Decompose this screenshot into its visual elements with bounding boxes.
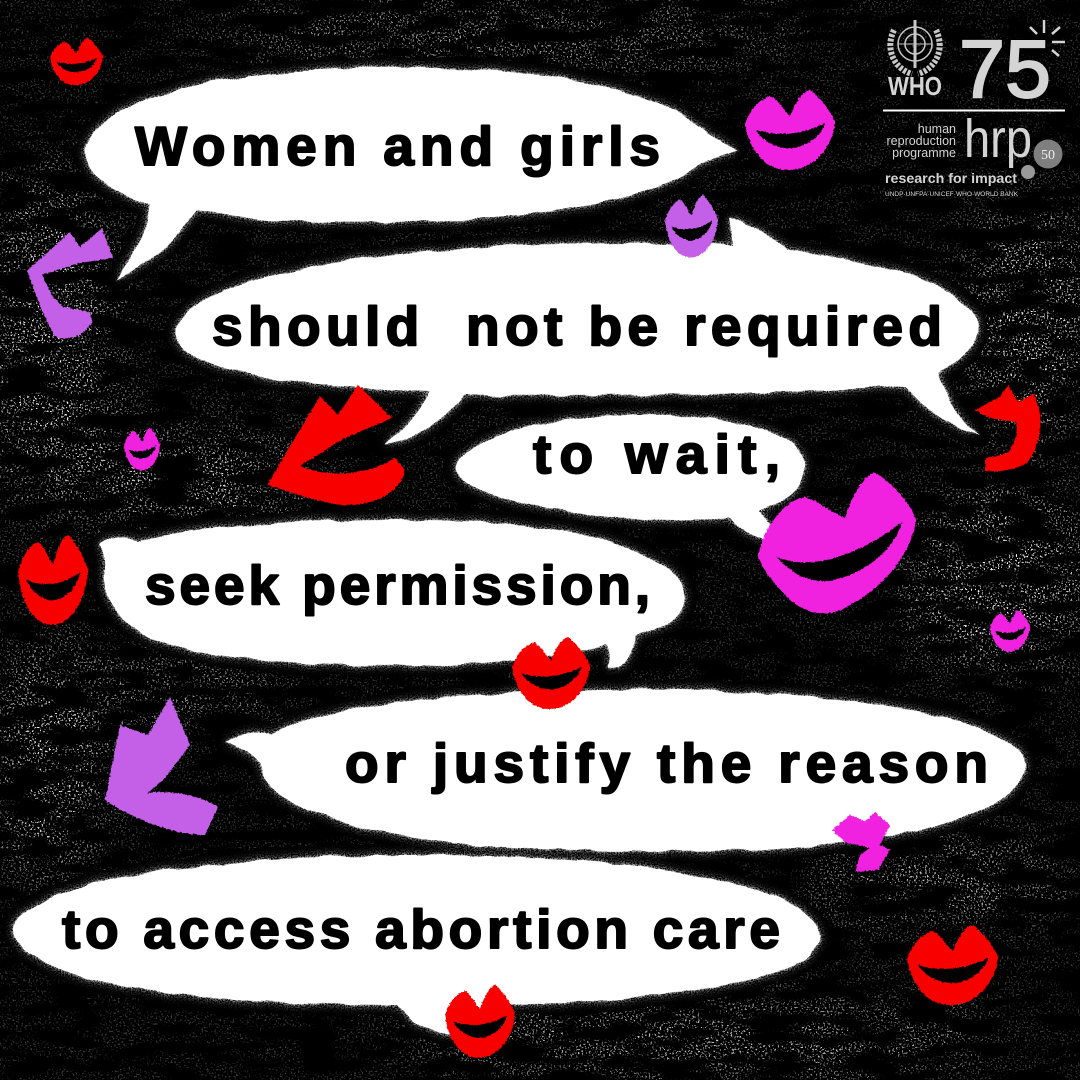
text: to access abortion care: to access abortion care [62, 898, 780, 960]
speech bubble: Women and girls [85, 68, 738, 280]
icon: WHO emblem [890, 20, 940, 74]
text: research for impact: research for impact [885, 171, 1018, 186]
speech bubble: or justify the reason [225, 690, 1025, 851]
icon: magenta lips top [745, 90, 835, 170]
icon: grey dot [1021, 165, 1035, 179]
text: human reproduction programme: human [918, 122, 956, 136]
divider [883, 110, 1065, 112]
icon: large purple lips [105, 697, 218, 835]
text: human reproduction programme: programme [892, 146, 956, 160]
speech bubble: to access abortion care [15, 855, 820, 1035]
icon: red lips right [975, 385, 1041, 471]
icon: red lips centre [512, 637, 590, 709]
text: hrp: hrp [964, 109, 1032, 169]
text: should not be required: should not be required [212, 295, 942, 357]
speech bubble: seek permission [100, 520, 685, 668]
text: to wait,: to wait, [533, 423, 780, 485]
text: seek permission,: seek permission, [145, 554, 650, 616]
icon: sun rays [1030, 20, 1065, 56]
icon: 50 badge: 50 [1041, 148, 1055, 163]
icon: magenta lips lower [832, 812, 890, 872]
icon: red lips lower right [907, 925, 998, 1005]
text: Women and girls: Women and girls [135, 115, 660, 177]
text: human reproduction programme: reproduction [886, 134, 956, 148]
text: or justify the reason: or justify the reason [345, 732, 988, 794]
speech bubble: to wait [455, 415, 805, 546]
text: partners: UNDP·UNFPA·UNICEF·WHO·WORLD BANK [885, 192, 1018, 198]
icon: purple small lips top [665, 195, 718, 257]
text: 75: 75 [959, 24, 1051, 115]
icon: tiny magenta lips [124, 428, 160, 470]
icon: large red lips [267, 385, 405, 505]
logos: WHO 75 and HRP 50 [883, 20, 1065, 198]
speech bubble: should not be required [175, 218, 978, 445]
text: WHO: WHO [888, 71, 942, 101]
icon: red lips top left [50, 38, 103, 85]
icon: red lips bottom [445, 985, 515, 1058]
icon: red lips left [18, 535, 88, 625]
icon: large magenta lips [758, 473, 916, 614]
icon: 50 badge [1034, 140, 1062, 168]
icon: small magenta lips right [990, 610, 1030, 652]
icon: purple lips left [27, 228, 113, 338]
